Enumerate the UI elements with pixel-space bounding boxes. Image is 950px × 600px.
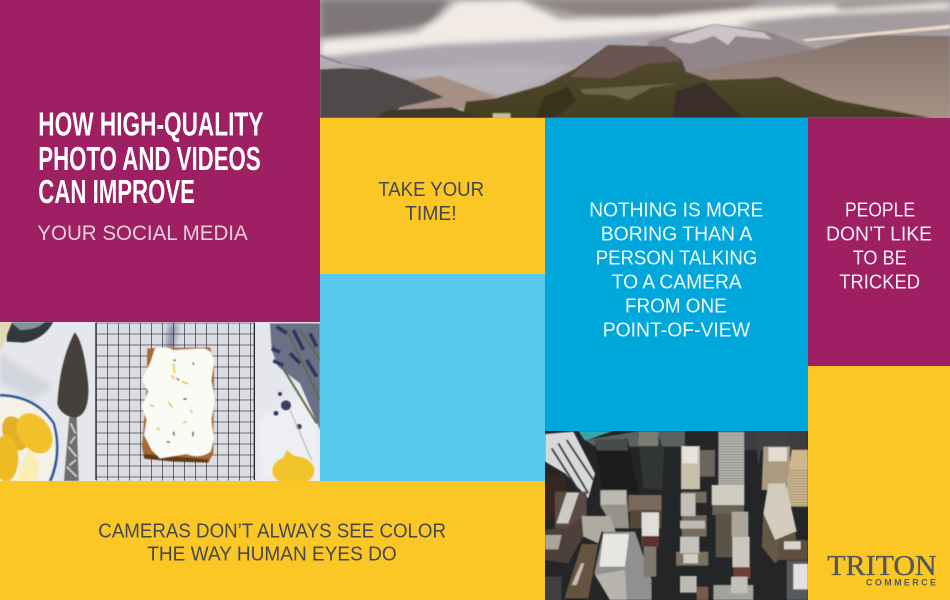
panel: title background — [0, 0, 320, 322]
text: nothing is more boring: POINT-OF-VIEW — [603, 319, 751, 342]
icon: plate top-left — [7, 322, 53, 343]
panel: nothing is more boring — [545, 118, 808, 431]
text: people don't like to be tricked: TRICKED — [839, 271, 920, 294]
text: people don't like to be tricked — [826, 199, 932, 294]
panel: right yellow block — [808, 366, 950, 600]
text: nothing is more boring: NOTHING IS MORE — [589, 199, 763, 222]
title: HOW HIGH-QUALITY — [38, 106, 263, 142]
text: people don't like to be tricked: PEOPLE — [845, 199, 915, 222]
panel: city photo — [545, 430, 808, 600]
panel: mountain photo — [320, 0, 950, 118]
icon: cooling rack — [96, 323, 254, 481]
text: people don't like to be tricked: TO BE — [853, 247, 907, 270]
title — [38, 106, 263, 210]
text: nothing is more boring: BORING THAN A — [601, 223, 753, 246]
icon: cake server — [57, 332, 88, 418]
text: people don't like to be tricked: DON’T LIKE — [826, 222, 932, 246]
title: PHOTO AND VIDEOS — [38, 140, 261, 177]
panel: people don't like to be tricked — [808, 118, 950, 366]
text: nothing is more boring: PERSON TALKING — [596, 247, 757, 270]
panel: take your time — [320, 118, 545, 274]
text: cameras don't always see color: THE WAY HUMAN EYES DO — [147, 544, 397, 566]
text: nothing is more boring: FROM ONE — [625, 295, 727, 318]
panel: food photo — [0, 320, 320, 485]
icon: loaf cake — [142, 347, 214, 463]
logo: Triton Commerce: TRITON — [827, 551, 937, 582]
icon: lemons — [2, 416, 27, 451]
text: take your time: TAKE YOUR — [378, 178, 484, 201]
subtitle: YOUR SOCIAL MEDIA — [37, 222, 248, 245]
panel: light blue block — [320, 274, 545, 481]
text: nothing is more boring — [589, 199, 763, 342]
text: cameras don't always see color: CAMERAS DON’T ALWAYS SEE COLOR — [98, 521, 446, 543]
icon: lemon plate — [0, 394, 58, 481]
logo: Triton Commerce: COMMERCE — [866, 578, 936, 588]
text: nothing is more boring: TO A CAMERA — [612, 271, 742, 294]
icon: lavender — [270, 323, 320, 430]
panel: cameras don't always see color — [0, 481, 545, 600]
text: cameras don't always see color — [98, 521, 446, 566]
text: take your time — [378, 178, 484, 225]
title: CAN IMPROVE — [38, 173, 195, 210]
text: take your time: TIME! — [405, 202, 457, 225]
